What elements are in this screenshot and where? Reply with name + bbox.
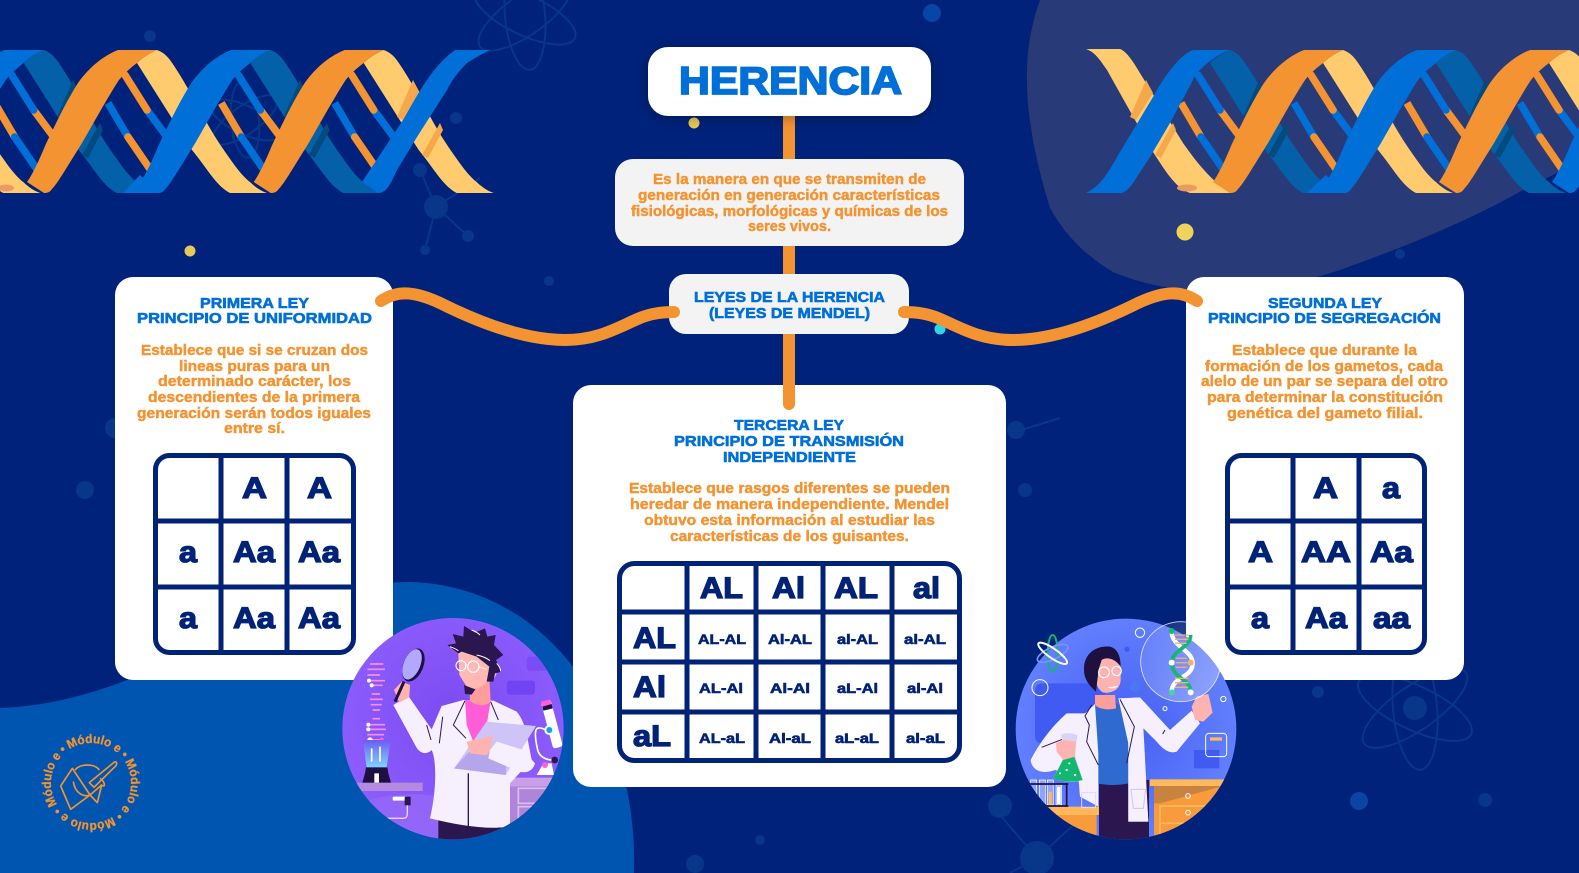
table: tercera ley punnett square: Al-aL (769, 730, 812, 746)
text: segunda ley description: Establece que durante la (1232, 343, 1418, 359)
heading: primera ley: PRIMERA LEY (200, 296, 309, 312)
laws heading text: LEYES DE LA HERENCIA (694, 290, 886, 306)
heading: primera ley: PRINCIPIO DE UNIFORMIDAD (137, 311, 372, 327)
laws heading text (694, 290, 886, 322)
text: segunda ley description: para determinar la constitución (1207, 390, 1443, 406)
table: tercera ley punnett square: al (913, 572, 940, 605)
decorative dot: yellow left (184, 246, 196, 256)
heading: tercera ley (674, 418, 904, 466)
connector: right wavy line (904, 293, 1197, 340)
table: tercera ley punnett square: AL (834, 572, 878, 605)
table: segunda ley punnett square (1227, 455, 1425, 653)
table: primera ley punnett square: a (179, 536, 197, 569)
logo ring text: Módulo e • Módulo e • Módulo e • Módulo e • (42, 734, 140, 832)
laws heading box (669, 274, 909, 334)
panel: primera ley (115, 277, 393, 680)
table: tercera ley punnett square: al-Al (907, 680, 943, 696)
illustration: scientist with flask and DNA bubble (1016, 619, 1236, 843)
text: tercera ley description: heredar de manera independiente. Mendel (630, 497, 949, 513)
heading: segunda ley (1208, 296, 1441, 327)
heading: tercera ley: TERCERA LEY (734, 418, 844, 434)
table: primera ley punnett square: A (307, 472, 332, 505)
definition text (631, 172, 948, 235)
table: segunda ley punnett square: A (1248, 536, 1273, 569)
table: primera ley punnett square: A (242, 472, 267, 505)
table: segunda ley punnett square: A (1313, 472, 1338, 505)
table: primera ley punnett square: Aa (233, 536, 275, 569)
heading: primera ley (137, 296, 372, 327)
text: segunda ley description (1201, 343, 1448, 422)
table: segunda ley punnett square: AA (1301, 536, 1351, 569)
definition text: generación en generación características (638, 188, 940, 204)
text: primera ley description: Establece que si se cruzan dos (141, 343, 368, 359)
heading: segunda ley: PRINCIPIO DE SEGREGACIÓN (1208, 309, 1441, 327)
table: tercera ley punnett square: al-aL (906, 730, 946, 746)
text: primera ley description (137, 343, 371, 437)
heading: tercera ley: INDEPENDIENTE (723, 450, 856, 466)
heading: tercera ley: PRINCIPIO DE TRANSMISIÓN (674, 432, 904, 450)
panel: segunda ley (1186, 277, 1464, 680)
table: tercera ley punnett square: aL-Al (837, 680, 878, 696)
logo icon: book and pencil (61, 762, 117, 809)
table: tercera ley punnett square: aL-aL (835, 730, 880, 746)
decorative dot: yellow top (688, 118, 700, 128)
table: segunda ley punnett square: Aa (1370, 536, 1413, 569)
table: tercera ley punnett square: AL-Al (699, 680, 743, 696)
text: primera ley description: determinado carácter, los (158, 374, 351, 390)
table: tercera ley punnett square: AL-AL (698, 631, 746, 647)
text: tercera ley description: obtuvo esta información al estudiar las (644, 513, 935, 529)
table: tercera ley punnett square (619, 563, 960, 761)
table: primera ley punnett square: a (179, 602, 197, 635)
table: tercera ley punnett square: al-AL (837, 631, 879, 647)
text: tercera ley description: características de los guisantes. (670, 529, 909, 545)
heading: segunda ley: SEGUNDA LEY (1268, 296, 1382, 312)
text: segunda ley description: alelo de un par se separa del otro (1201, 374, 1448, 390)
text: tercera ley description: Establece que rasgos diferentes se pueden (629, 481, 950, 497)
table: tercera ley punnett square: AL (700, 572, 743, 605)
illustration: scientist with magnifying glass (340, 618, 567, 843)
table: tercera ley punnett square: al-AL (904, 631, 947, 647)
table: tercera ley punnett square: AL-aL (699, 730, 746, 746)
table: segunda ley punnett square: Aa (1305, 602, 1347, 635)
text: segunda ley description: formación de los gametos, cada (1205, 359, 1444, 375)
title box (648, 47, 931, 116)
decorative dot: cyan (934, 324, 946, 334)
table: primera ley punnett square (155, 455, 354, 653)
panel: tercera ley (573, 385, 1006, 787)
text: tercera ley description (629, 481, 950, 545)
table: primera ley punnett square: Aa (233, 602, 275, 635)
text: primera ley description: entre sí. (224, 421, 285, 437)
background shape: top right pale blob (1027, 0, 1579, 291)
table: tercera ley punnett square: AL (633, 622, 676, 655)
definition text: Es la manera en que se transmiten de (653, 172, 926, 188)
text: primera ley description: descendientes de la primera (148, 390, 361, 406)
table: tercera ley punnett square: aL (633, 720, 671, 753)
table: tercera ley punnett square: Al (772, 572, 805, 605)
table: tercera ley punnett square: Al-Al (770, 680, 810, 696)
table: primera ley punnett square: Aa (298, 536, 340, 569)
decorative dot: yellow right (1176, 224, 1194, 240)
table: segunda ley punnett square: a (1251, 602, 1269, 635)
DNA helix right (1086, 49, 1579, 193)
connector: left wavy line (381, 293, 674, 340)
text: segunda ley description: genética del gameto filial. (1227, 406, 1423, 422)
title text: HERENCIA (679, 60, 902, 103)
logo: Módulo e badge (42, 734, 140, 832)
table: tercera ley punnett square: Al (633, 671, 666, 704)
vertical connector (783, 110, 795, 405)
table: primera ley punnett square: Aa (298, 602, 340, 635)
text: primera ley description: generación serán todos iguales (137, 406, 371, 422)
text: primera ley description: lineas puras para un (179, 359, 330, 375)
definition text: seres vivos. (748, 219, 831, 235)
definition box (615, 159, 964, 246)
DNA helix left (0, 50, 494, 193)
table: segunda ley punnett square: a (1382, 472, 1400, 505)
table: tercera ley punnett square: Al-AL (768, 631, 813, 647)
definition text: fisiológicas, morfológicas y químicas de los (631, 204, 948, 220)
laws heading text: (LEYES DE MENDEL) (709, 306, 870, 322)
connector end over panel (783, 385, 795, 404)
table: segunda ley punnett square: aa (1373, 602, 1410, 635)
background shape: bottom left blue blob (0, 582, 634, 873)
